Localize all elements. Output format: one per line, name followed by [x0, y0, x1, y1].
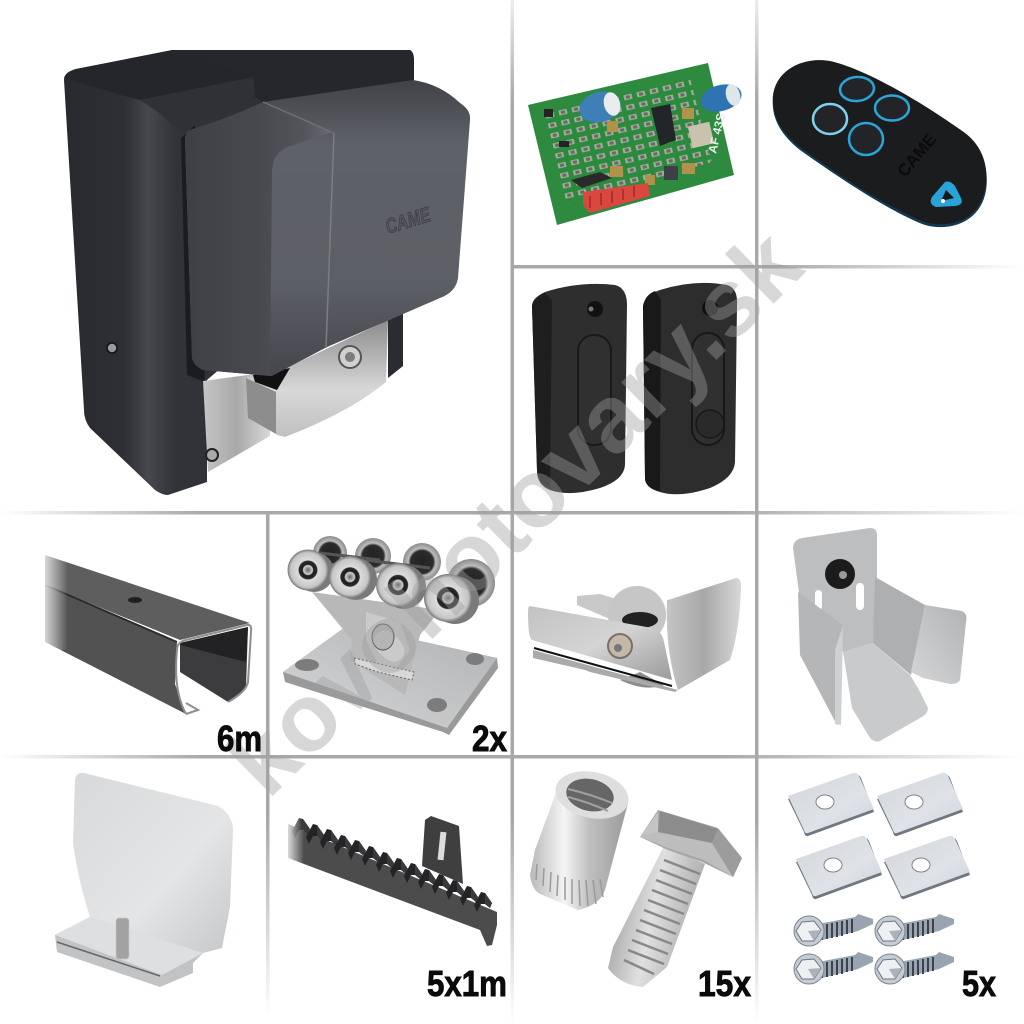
rear wheels	[313, 536, 347, 570]
base plate	[283, 625, 498, 735]
left photocell	[532, 284, 627, 493]
bracket	[422, 816, 463, 884]
key ring	[931, 182, 962, 207]
back plate	[793, 528, 877, 652]
components	[651, 104, 676, 146]
wing bracket	[312, 592, 440, 695]
product: roller carriage	[283, 536, 498, 735]
product: remote control	[773, 60, 987, 227]
capacitors	[576, 87, 624, 127]
weld seam	[354, 658, 414, 680]
board label: AF 43S	[705, 112, 728, 155]
left flap	[798, 592, 843, 725]
cover shadow	[181, 125, 205, 382]
back tab and wheel	[577, 594, 620, 620]
watermark: kovohotovary.sk	[208, 209, 822, 816]
base	[55, 917, 203, 987]
floor tongue	[843, 643, 928, 742]
remote body	[773, 62, 987, 227]
brand logo: CAME	[383, 203, 434, 239]
shaft	[608, 846, 705, 987]
threaded stud	[116, 918, 129, 959]
rail cut edge	[176, 625, 251, 714]
rail side face	[45, 585, 186, 714]
product: guide plate	[55, 773, 233, 987]
pivot bolt	[372, 624, 394, 650]
quantity label: 6m: 6m	[217, 718, 262, 759]
product: gear rack	[284, 810, 497, 946]
product: end stop bracket	[793, 528, 966, 742]
buttons	[839, 76, 875, 102]
quantity label: 5x1m: 5x1m	[427, 963, 507, 1004]
right tab	[911, 605, 966, 684]
right photocell	[643, 283, 737, 494]
product: rivet nut	[530, 765, 633, 910]
rail inner channel	[180, 627, 248, 702]
quantity label: 15x: 15x	[698, 963, 751, 1004]
upright plate	[73, 773, 233, 953]
right wall	[873, 577, 925, 675]
nut body	[530, 790, 628, 910]
rear right bracket	[388, 313, 403, 378]
slots	[856, 583, 864, 610]
motor cover	[185, 80, 470, 376]
front wheels	[294, 552, 334, 592]
bolts	[339, 346, 361, 368]
rail top face	[45, 555, 250, 640]
quantity label: 2x: 2x	[472, 718, 507, 759]
product: photocell pair	[532, 283, 737, 494]
motor housing	[64, 50, 414, 495]
product: self-drilling screws	[794, 914, 954, 984]
product: hex bolt	[608, 810, 742, 987]
bumper	[825, 559, 855, 589]
logo: CAME	[894, 130, 940, 181]
product: steel rail	[38, 550, 251, 714]
nut top	[551, 765, 633, 825]
board	[528, 63, 734, 225]
housing top faces	[64, 50, 253, 100]
right flap	[667, 578, 741, 690]
teeth	[292, 818, 492, 912]
connector	[583, 183, 650, 213]
rack body	[288, 824, 497, 946]
head	[640, 810, 742, 877]
left panel	[528, 606, 672, 680]
screw	[608, 634, 632, 658]
quantity label: 5x: 5x	[962, 963, 996, 1004]
lower rail	[533, 650, 678, 692]
product: receiver circuit board	[528, 63, 745, 225]
product: end roller stop	[528, 578, 741, 692]
product: gate motor	[64, 50, 470, 495]
knurling	[536, 864, 603, 906]
sliding metal pinion guard	[246, 320, 388, 437]
product: square washers	[788, 773, 970, 899]
rear metal plate	[203, 372, 270, 472]
